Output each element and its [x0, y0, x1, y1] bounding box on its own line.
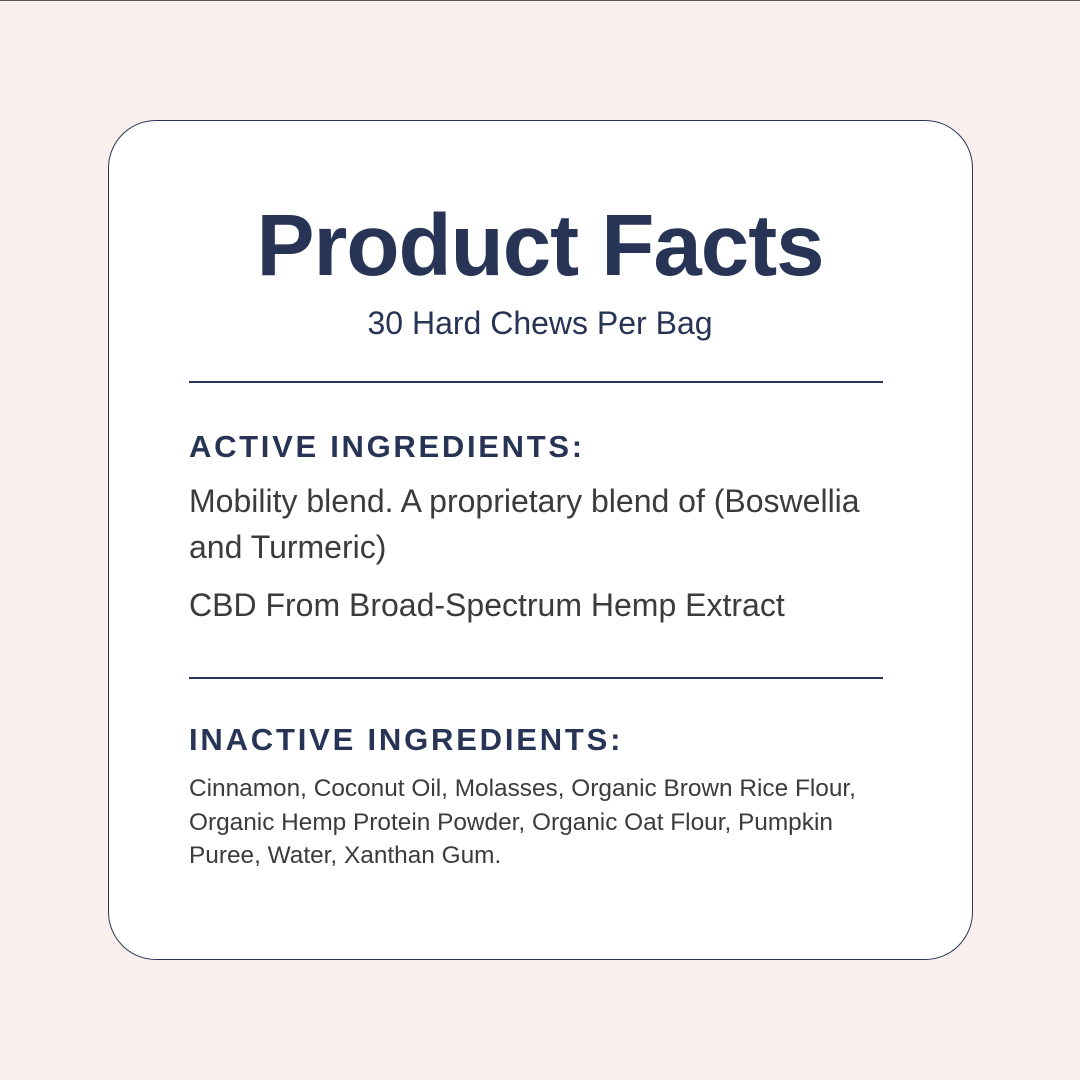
text block: active ingredients: Mobility blend. A proprietary blend of (Boswellia [189, 483, 860, 519]
text block: inactive ingredients: Organic Hemp Protein Powder, Organic Oat Flour, Pumpkin [189, 808, 833, 836]
text block: inactive ingredients [189, 775, 856, 869]
text block: active ingredients: and Turmeric) [189, 529, 386, 565]
card panel [108, 120, 973, 960]
text block: inactive ingredients: Puree, Water, Xanthan Gum. [189, 842, 501, 869]
subtitle: 30 Hard Chews Per Bag [367, 305, 713, 341]
text block: active ingredients: CBD From Broad-Spectrum Hemp Extract [189, 587, 785, 623]
heading: active ingredients: ACTIVE INGREDIENTS: [189, 429, 585, 464]
text block: inactive ingredients: Cinnamon, Coconut Oil, Molasses, Organic Brown Rice Flour, [189, 775, 856, 802]
text block: active ingredients [189, 483, 860, 623]
title: Product Facts [256, 197, 824, 294]
heading: inactive ingredients: INACTIVE INGREDIENTS: [189, 722, 623, 757]
